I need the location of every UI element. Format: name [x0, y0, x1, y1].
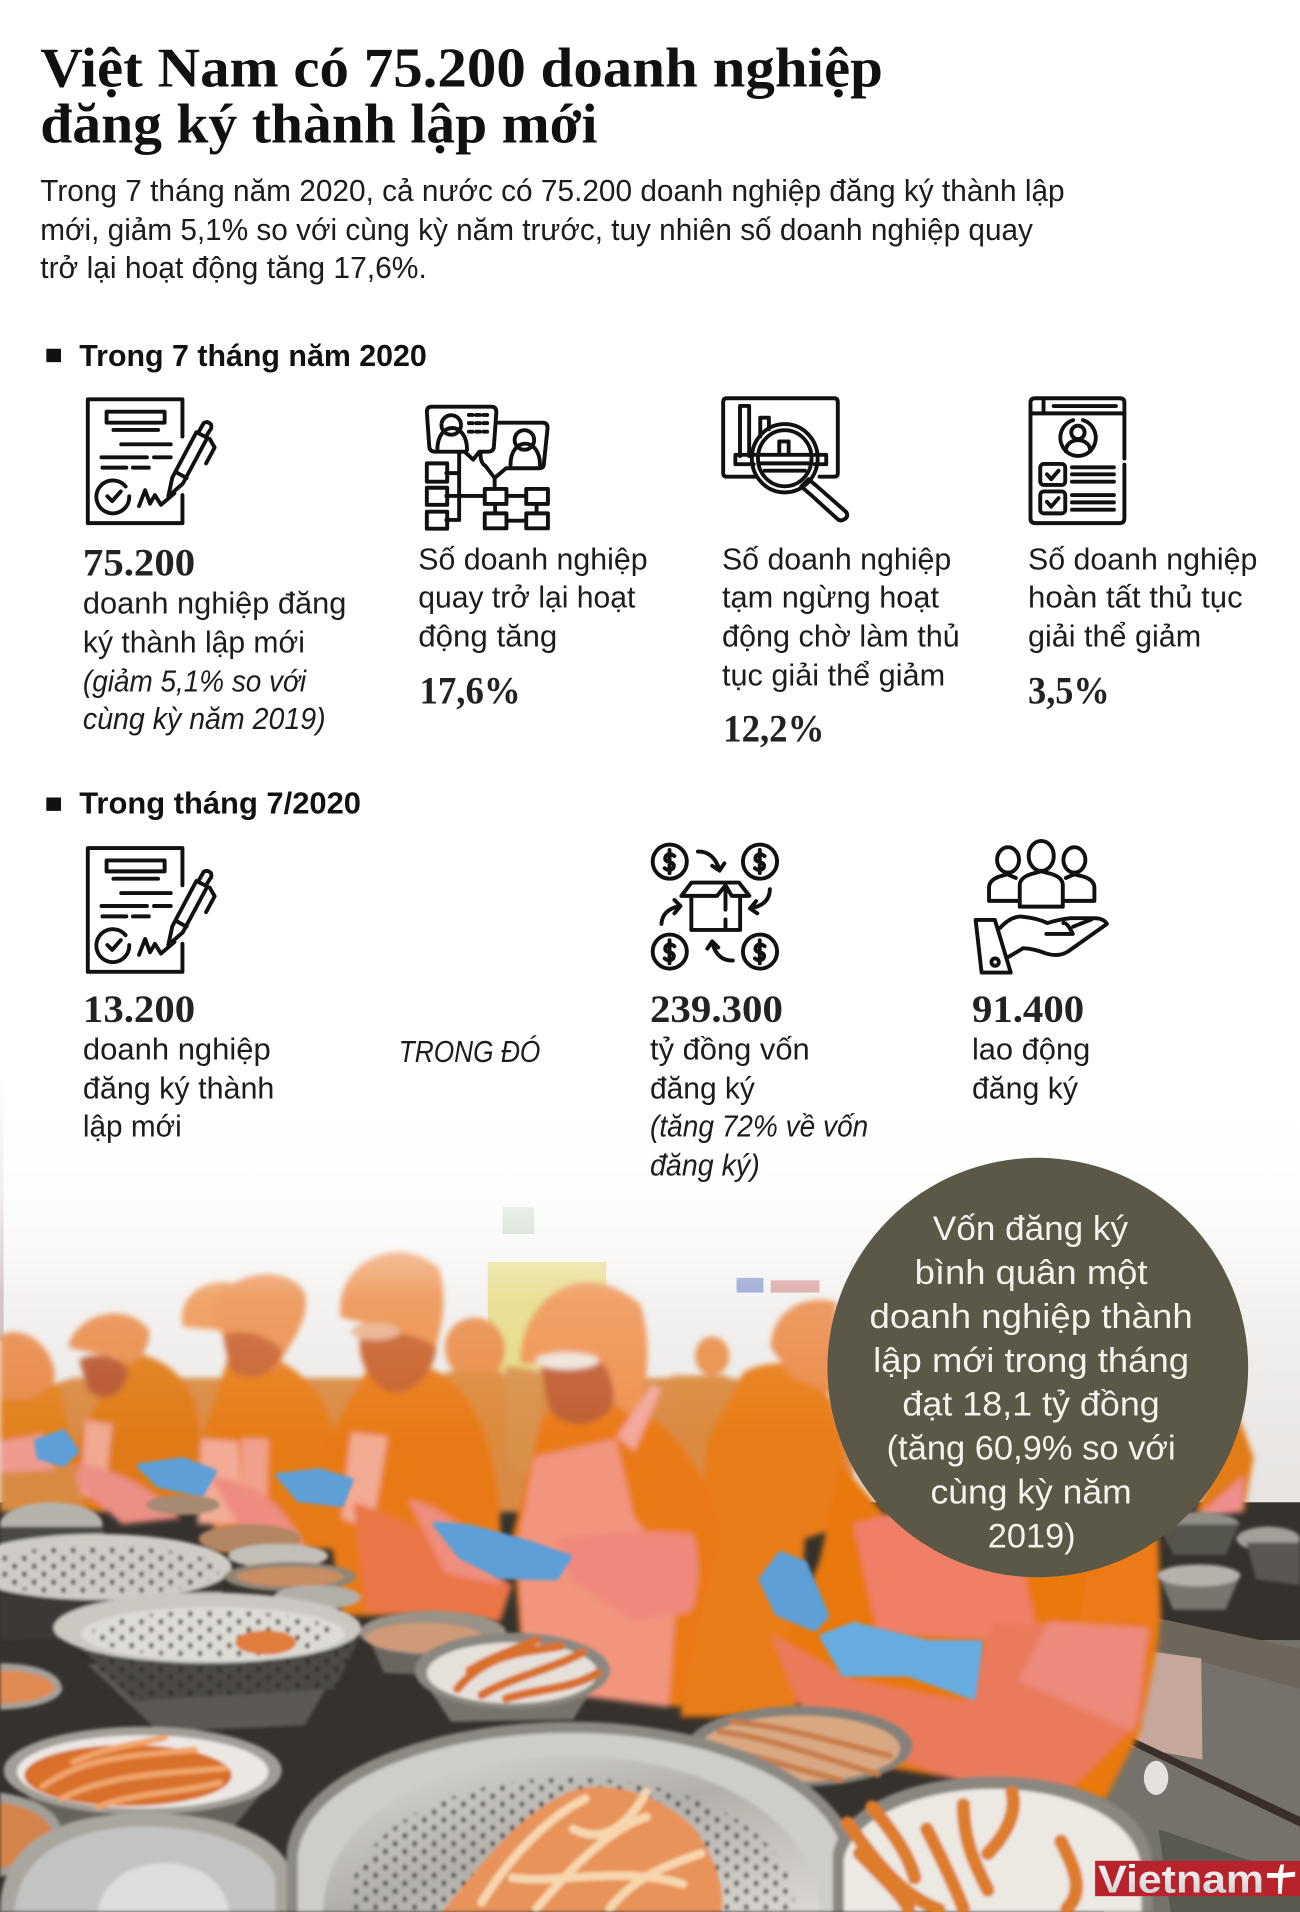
intro text — [40, 174, 1065, 285]
back workers — [445, 1318, 729, 1482]
icon: chart under magnifier — [723, 398, 847, 520]
stat: 239.300 billion registered capital: đăng ký) — [650, 1148, 760, 1182]
worker F main — [512, 1282, 722, 1707]
callout: average registered capital: doanh nghiệp thành — [870, 1298, 1193, 1336]
stat: 239.300 billion registered capital: đăng ký — [650, 1072, 756, 1106]
large shrimp bowl left — [4, 1727, 282, 1829]
section heading: July 2020: Trong tháng 7/2020 — [79, 786, 361, 820]
stat: 13.200 new enterprises: đăng ký thành — [83, 1072, 274, 1106]
logo: Vietnam+: Vietnam — [1098, 1858, 1264, 1901]
stat: returning enterprises 17,6%: quay trở lại hoạt — [418, 580, 636, 614]
stat: suspended enterprises 12,2% — [722, 542, 960, 750]
title: Việt Nam có 75.200 doanh nghiệp — [40, 38, 883, 100]
stat: 239.300 billion registered capital — [650, 988, 868, 1182]
stat: 75.200 new enterprises — [83, 542, 346, 736]
stat: returning enterprises 17,6%: động tăng — [418, 619, 557, 653]
stat: 13.200 new enterprises: doanh nghiệp — [83, 1033, 271, 1067]
stat: suspended enterprises 12,2%: Số doanh nghiệp — [722, 542, 951, 576]
stat: dissolved enterprises 3,5%: 3,5% — [1028, 670, 1110, 713]
stat: dissolved enterprises 3,5%: Số doanh nghiệp — [1028, 542, 1257, 576]
stat: 91.400 registered workers: lao động — [972, 1033, 1090, 1067]
empty bowl bottom left — [0, 1813, 290, 1912]
icon: signed document July — [88, 848, 215, 972]
stat: 91.400 registered workers: đăng ký — [972, 1072, 1079, 1106]
bowl with shrimp center — [360, 1611, 610, 1722]
icon: capital box with coins — [653, 845, 777, 969]
blue gloves — [37, 1432, 980, 1697]
stat: 75.200 new enterprises: (giảm 5,1% so với — [83, 664, 307, 698]
stat: 75.200 new enterprises: cùng kỳ năm 2019) — [83, 702, 326, 736]
icon: profile checklist card — [1030, 398, 1124, 523]
callout: average registered capital: cùng kỳ năm — [930, 1474, 1132, 1512]
stat: dissolved enterprises 3,5%: hoàn tất thủ tục — [1028, 580, 1243, 614]
dark work table and floor — [0, 1502, 1300, 1912]
backdrop of far workers — [0, 1378, 854, 1512]
label: of which: TRONG ĐÓ — [399, 1034, 540, 1069]
icon: people and network — [427, 407, 548, 529]
title: đăng ký thành lập mới — [40, 94, 598, 156]
stat: suspended enterprises 12,2%: tạm ngừng hoạt — [722, 580, 940, 614]
callout: average registered capital — [827, 1158, 1248, 1577]
stat: returning enterprises 17,6%: Số doanh nghiệp — [418, 542, 648, 576]
stat: 13.200 new enterprises — [83, 988, 274, 1143]
stat: 75.200 new enterprises: ký thành lập mới — [83, 625, 305, 659]
callout: average registered capital: lập mới trong tháng — [873, 1342, 1189, 1380]
stat: returning enterprises 17,6%: 17,6% — [420, 670, 521, 713]
shrimp bowl right of colander — [688, 1706, 912, 1786]
stat: 239.300 billion registered capital: tỷ đồng vốn — [650, 1033, 810, 1067]
door in background — [488, 1262, 606, 1372]
intro text: Trong 7 tháng năm 2020, cả nước có 75.200 doanh nghiệp đăng ký thành lập — [40, 174, 1065, 208]
stat: suspended enterprises 12,2%: tục giải thể giảm — [722, 658, 945, 692]
callout: average registered capital: 2019) — [988, 1517, 1076, 1555]
icon: people on open hand — [976, 841, 1107, 973]
stat: 13.200 new enterprises: lập mới — [83, 1109, 182, 1143]
bowl left edge lower — [0, 1792, 62, 1877]
photo: workers peeling shrimp — [0, 1073, 1300, 1912]
stat: 75.200 new enterprises: 75.200 — [83, 542, 195, 585]
worker G back — [680, 1300, 849, 1717]
callout: average registered capital: (tăng 60,9% so với — [887, 1430, 1176, 1468]
stat: 91.400 registered workers — [972, 988, 1090, 1106]
worker C — [182, 1274, 341, 1551]
stat: 91.400 registered workers: 91.400 — [972, 988, 1084, 1031]
stat: suspended enterprises 12,2%: 12,2% — [723, 707, 824, 750]
intro text: trở lại hoạt động tăng 17,6%. — [40, 251, 427, 285]
background signs — [502, 1207, 820, 1293]
big shrimp bowl right — [833, 1777, 1152, 1912]
section heading: 7 months: Trong 7 tháng năm 2020 — [79, 339, 427, 373]
title — [40, 38, 883, 156]
stat: suspended enterprises 12,2%: động chờ làm thủ — [722, 619, 960, 653]
worker H foreground — [771, 1414, 1254, 1802]
fade into white background — [0, 1073, 1300, 1439]
metal bowls and shrimp — [0, 1495, 1300, 1912]
stat: dissolved enterprises 3,5%: giải thể giảm — [1028, 619, 1201, 653]
big colander foreground — [287, 1722, 857, 1912]
callout: average registered capital: Vốn đăng ký — [933, 1210, 1128, 1248]
worker D — [320, 1252, 512, 1622]
stacked colanders left — [0, 1495, 363, 1732]
stat: returning enterprises 17,6% — [418, 542, 648, 713]
stat: 75.200 new enterprises: doanh nghiệp đăng — [83, 586, 346, 620]
bowls right side — [1157, 1512, 1300, 1610]
callout: average registered capital: đạt 18,1 tỷ đồng — [902, 1386, 1160, 1424]
callout: average registered capital: bình quân một — [915, 1254, 1148, 1292]
far left worker — [0, 1332, 76, 1473]
workers — [0, 1252, 1254, 1802]
worker B — [68, 1313, 203, 1524]
stat: 13.200 new enterprises: 13.200 — [83, 988, 195, 1031]
left edge bowl — [0, 1663, 62, 1710]
stat: 239.300 billion registered capital: 239.300 — [650, 988, 783, 1031]
stat: dissolved enterprises 3,5% — [1028, 542, 1257, 713]
stat: 239.300 billion registered capital: (tăng 72% về vốn — [650, 1109, 868, 1143]
intro text: mới, giảm 5,1% so với cùng kỳ năm trước, tuy nhiên số doanh nghiệp quay — [40, 213, 1034, 247]
icon: signed document — [88, 399, 215, 523]
